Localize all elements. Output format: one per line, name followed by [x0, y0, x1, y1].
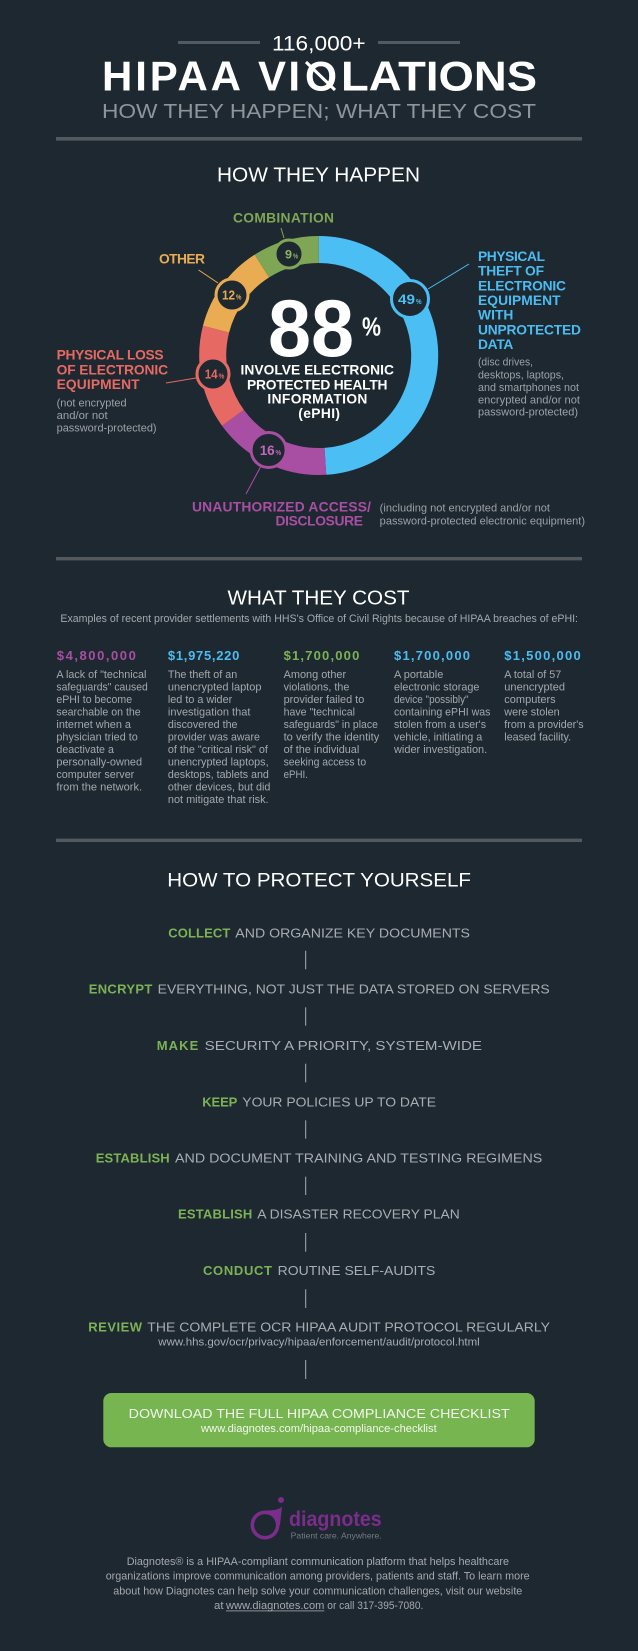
label: physical theft: [478, 249, 581, 352]
badge: 14%: %: [219, 373, 225, 380]
settlement: $4,800,000: personally-owned: [56, 757, 142, 769]
settlement: $1,700,000 green: Among other: [284, 669, 346, 681]
settlement: $1,975,220: The theft of an: [168, 669, 237, 681]
settlement: $1,700,000 blue: containing ePHI was: [394, 706, 491, 718]
label: unauthorized access: DISCLOSURE: [276, 514, 363, 529]
settlement: $1,700,000 green: have "technical: [284, 706, 355, 718]
settlement: $1,500,000: A total of 57: [504, 669, 561, 681]
step: keep: YOUR POLICIES UP TO DATE: [242, 1094, 436, 1109]
settlement: $4,800,000: ePHI to become: [56, 694, 132, 706]
step: review: THE COMPLETE OCR HIPAA AUDIT PROTOCOL REGULARLY: [147, 1319, 550, 1334]
logo: diagnotes: Patient care. Anywhere.: [291, 1531, 382, 1541]
settlement: $1,700,000 blue: device "possibly": [394, 694, 469, 706]
note: physical loss: [57, 397, 157, 434]
settlement: $1,700,000 green: violations, the: [284, 681, 349, 693]
note: physical theft: password-protected): [478, 407, 578, 419]
settlement: $1,700,000 green: provider failed to: [284, 694, 364, 706]
settlement: $1,975,220: led to a wider: [168, 694, 233, 706]
step: conduct: [203, 1263, 436, 1278]
button: download checklist: www.diagnotes.com/hipaa-compliance-checklist: [200, 1423, 437, 1435]
step: keep: KEEP: [202, 1094, 238, 1109]
settlement: $1,975,220: of the "critical risk" of: [168, 744, 269, 756]
note: physical theft: desktops, laptops,: [478, 369, 564, 381]
settlement: $1,500,000: $1,500,000: [504, 648, 581, 663]
note: physical loss: password-protected): [57, 422, 157, 434]
settlement: $4,800,000: physician tried to: [56, 731, 138, 743]
company description: [106, 1556, 530, 1612]
settlement: $1,700,000 green: ePHI.: [284, 769, 308, 781]
badge: 16%: 16: [260, 443, 275, 458]
leader lines: [166, 228, 469, 494]
settlement: $4,800,000: safeguards" caused: [56, 681, 148, 693]
company description: organizations improve communication among providers, patients and staff. To learn more: [106, 1571, 530, 1583]
step: conduct: CONDUCT: [203, 1263, 272, 1278]
label: physical theft: UNPROTECTED: [478, 322, 581, 337]
center stat: 88%: %: [362, 311, 381, 341]
label: physical theft: THEFT OF: [478, 264, 544, 279]
label: physical theft: EQUIPMENT: [478, 293, 561, 308]
note: physical theft: [478, 357, 580, 419]
donut chart: [166, 228, 469, 494]
badge: 49%: [392, 280, 428, 318]
company description: www.diagnotes.com: [225, 1600, 324, 1612]
settlement: $4,800,000: A lack of "technical: [56, 669, 146, 681]
badge: 49%: %: [416, 299, 422, 306]
settlement: $1,500,000: were stolen: [503, 706, 560, 718]
title: O: [305, 53, 337, 100]
header rules and count: 116,000+: [272, 33, 366, 56]
footer: [106, 1497, 530, 1612]
step: review: www.hhs.gov/ocr/privacy/hipaa/enforcement/audit/protocol.html: [157, 1336, 480, 1348]
settlement: $1,500,000: from a provider's: [504, 719, 584, 731]
step: collect: COLLECT: [168, 925, 230, 940]
step: establish training: ESTABLISH: [96, 1150, 170, 1165]
settlement: $1,975,220: not mitigate that risk.: [168, 794, 269, 806]
settlement: $1,975,220: other devices, but did: [168, 781, 270, 793]
settlement: $1,700,000 blue: $1,700,000: [394, 648, 470, 663]
settlement: $1,975,220: desktops, tablets and: [168, 769, 269, 781]
badge: 9%: [275, 240, 303, 268]
note: unauthorized access: [380, 503, 585, 527]
title: LATIONS: [341, 53, 537, 100]
center caption: PROTECTED HEALTH: [247, 377, 388, 392]
settlement: $4,800,000: $4,800,000: [57, 648, 136, 663]
label: unauthorized access: UNAUTHORIZED ACCESS/: [192, 499, 371, 514]
settlement: $1,500,000: [503, 648, 584, 743]
button: download checklist: [103, 1393, 535, 1447]
step: encrypt: EVERYTHING, NOT JUST THE DATA STORED ON SERVERS: [158, 982, 550, 997]
label: physical loss: EQUIPMENT: [57, 377, 140, 392]
settlement: $4,800,000: computer server: [56, 769, 135, 781]
settlement: $1,700,000 green: $1,700,000: [284, 648, 359, 663]
company description: Diagnotes® is a HIPAA-compliant communication platform that helps healthcare: [127, 1556, 509, 1568]
step: establish recovery: ESTABLISH: [178, 1207, 252, 1222]
settlement: $1,700,000 green: of the individual: [284, 744, 359, 756]
settlement: $1,700,000 blue: vehicle, initiating a: [394, 731, 483, 743]
note: physical loss: and/or not: [57, 410, 108, 422]
settlement: $1,975,220: $1,975,220: [168, 648, 239, 663]
subtitle: HOW THEY HAPPEN; WHAT THEY COST: [102, 101, 536, 123]
panel: how to protect yourself: [88, 870, 550, 1447]
label: other: OTHER: [159, 251, 205, 266]
settlement: $1,700,000 green: to verify the identity: [284, 731, 380, 743]
title: HIPAA: [102, 53, 241, 100]
settlement: $1,975,220: [168, 648, 270, 806]
note: physical loss: (not encrypted: [57, 397, 127, 409]
step: make: MAKE: [157, 1038, 199, 1053]
settlement: $4,800,000: [56, 648, 148, 793]
step: make: SECURITY A PRIORITY, SYSTEM-WIDE: [205, 1038, 482, 1053]
intro text: Examples of recent provider settlements with HHS's Office of Civil Rights because of HIPAA breaches of ePHI:: [60, 613, 578, 625]
step: collect: AND ORGANIZE KEY DOCUMENTS: [235, 925, 470, 940]
note: unauthorized access: password-protected electronic equipment): [380, 515, 585, 527]
label: physical loss: OF ELECTRONIC: [57, 362, 168, 377]
step: review: [88, 1319, 550, 1348]
step: establish recovery: [178, 1207, 460, 1222]
settlement: $4,800,000: searchable on the: [56, 706, 141, 718]
badge: 16%: [251, 432, 286, 468]
badge: 12%: [216, 279, 248, 311]
heading: what they cost: WHAT THEY COST: [228, 587, 410, 609]
company description: about how Diagnotes can help solve your communication challenges, visit our website: [113, 1585, 522, 1597]
settlement: $1,700,000 blue: electronic storage: [394, 681, 479, 693]
center caption: INFORMATION: [267, 392, 367, 407]
settlement: $1,975,220: discovered the: [168, 719, 238, 731]
center caption: INVOLVE ELECTRONIC: [240, 363, 394, 378]
title: [102, 53, 537, 100]
title: VI: [258, 53, 300, 100]
company description: or call 317-395-7080.: [327, 1600, 423, 1612]
heading: how they happen: HOW THEY HAPPEN: [217, 164, 420, 186]
settlement: $1,500,000: computers: [504, 694, 556, 706]
settlement: $1,700,000 green: safeguards" in place: [284, 719, 378, 731]
settlement: $1,700,000 blue: A portable: [394, 669, 443, 681]
panel: how they happen: [57, 164, 585, 529]
badge: 12%: 12: [222, 288, 235, 302]
step: establish training: AND DOCUMENT TRAINING AND TESTING REGIMENS: [175, 1150, 543, 1165]
note: physical theft: (disc drives,: [478, 357, 533, 369]
center caption: [240, 363, 394, 421]
note: physical theft: encrypted and/or not: [478, 394, 580, 406]
badge: 49%: 49: [398, 292, 415, 307]
badge: 14%: 14: [205, 367, 218, 381]
button: download checklist: DOWNLOAD THE FULL HIPAA COMPLIANCE CHECKLIST: [129, 1406, 510, 1421]
label: physical loss: [57, 348, 168, 392]
label: physical theft: WITH: [478, 308, 513, 323]
settlement: $1,500,000: unencrypted: [504, 681, 565, 693]
settlement: $4,800,000: deactivate a: [56, 744, 115, 756]
settlement: $1,500,000: leased facility.: [504, 731, 571, 743]
settlement: $1,975,220: unencrypted laptop: [168, 681, 262, 693]
label: unauthorized access: [192, 499, 371, 529]
label: physical theft: PHYSICAL: [478, 249, 545, 264]
settlement: $4,800,000: from the network.: [56, 781, 142, 793]
step: conduct: ROUTINE SELF-AUDITS: [278, 1263, 436, 1278]
note: physical theft: and smartphones not: [478, 382, 579, 394]
company description: at: [214, 1600, 224, 1612]
heading: how to protect yourself: HOW TO PROTECT YOURSELF: [167, 870, 471, 892]
badge: 12%: %: [236, 294, 242, 301]
settlement: $1,975,220: unencrypted laptops,: [168, 757, 269, 769]
label: physical theft: DATA: [478, 337, 513, 352]
badge: 16%: %: [276, 450, 282, 457]
step: review: REVIEW: [88, 1319, 143, 1334]
badge: 9%: 9: [285, 247, 292, 261]
settlement: $1,700,000 blue: wider investigation.: [393, 744, 487, 756]
badge: 9%: %: [293, 253, 299, 260]
settlement: $1,700,000 green: [284, 648, 380, 781]
logo: diagnotes: [250, 1497, 382, 1541]
settlement: $1,700,000 blue: [393, 648, 491, 756]
label: physical loss: PHYSICAL LOSS: [57, 348, 164, 363]
note: unauthorized access: (including not encrypted and/or not: [380, 503, 550, 515]
settlement: $1,700,000 blue: stolen from a user's: [394, 719, 486, 731]
settlement: $1,975,220: provider was aware: [168, 731, 260, 743]
panel: what they cost: [56, 587, 584, 806]
settlement: $1,700,000 green: seeking access to: [284, 757, 366, 769]
step: establish recovery: A DISASTER RECOVERY PLAN: [257, 1207, 460, 1222]
logo: diagnotes: diagnotes: [289, 1508, 382, 1531]
label: physical theft: ELECTRONIC: [478, 278, 566, 293]
header: [102, 33, 537, 123]
settlement: $1,975,220: investigation that: [168, 706, 250, 718]
center caption: (ePHI): [298, 406, 340, 421]
header rules and count: [178, 33, 460, 56]
center stat: 88%: 88: [268, 284, 354, 374]
settlement: $4,800,000: internet when a: [56, 719, 132, 731]
step: encrypt: ENCRYPT: [89, 982, 152, 997]
label: combination: COMBINATION: [233, 211, 334, 226]
badge: 14%: [197, 358, 229, 390]
